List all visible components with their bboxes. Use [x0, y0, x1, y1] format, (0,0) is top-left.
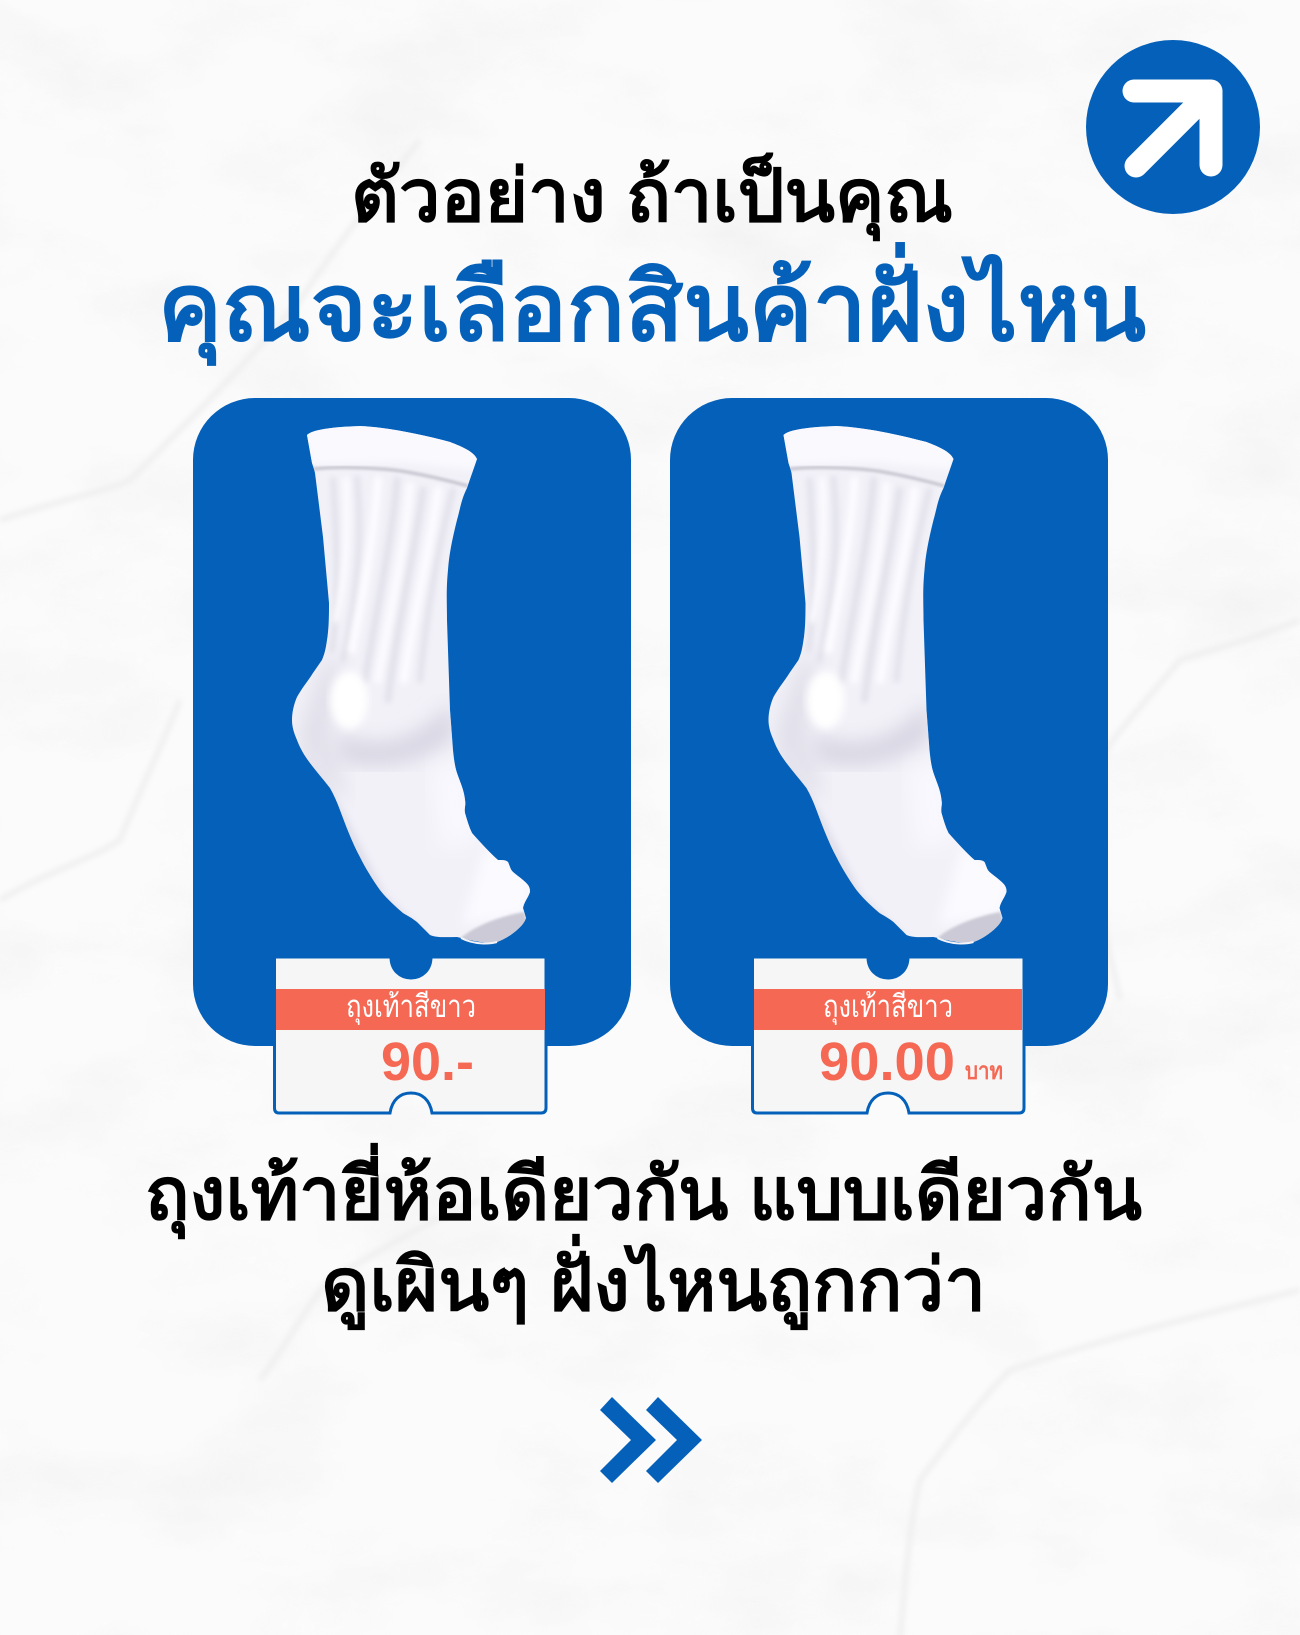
icon: double chevron arrow: [600, 1397, 702, 1483]
price tag: right: [752, 957, 1024, 1113]
body text line 1: ถุงเท้ายี่ห้อเดียวกัน แบบเดียวกัน: [145, 1142, 1142, 1240]
image: left white sock: [292, 425, 535, 945]
price: 90.-: 90.-: [381, 1032, 474, 1092]
panel: right product: [670, 398, 1108, 1113]
tag label: ถุงเท้าสีขาว: [346, 989, 476, 1026]
icon: arrow badge: [1086, 40, 1260, 214]
image: right white sock: [768, 425, 1012, 945]
panel: left product: [193, 398, 631, 1113]
body text line 2: ดูเผินๆ ฝั่งไหนถูกกว่า: [321, 1233, 986, 1331]
price unit: บาท: [965, 1058, 1003, 1085]
title line 2: คุณจะเลือกสินค้าฝั่งไหน: [158, 241, 1146, 366]
title line 1: ตัวอย่าง ถ้าเป็นคุณ: [351, 152, 953, 242]
price: 90.00: 90.00: [819, 1032, 955, 1092]
price tag: left: [274, 957, 546, 1113]
tag label: ถุงเท้าสีขาว: [823, 989, 953, 1026]
